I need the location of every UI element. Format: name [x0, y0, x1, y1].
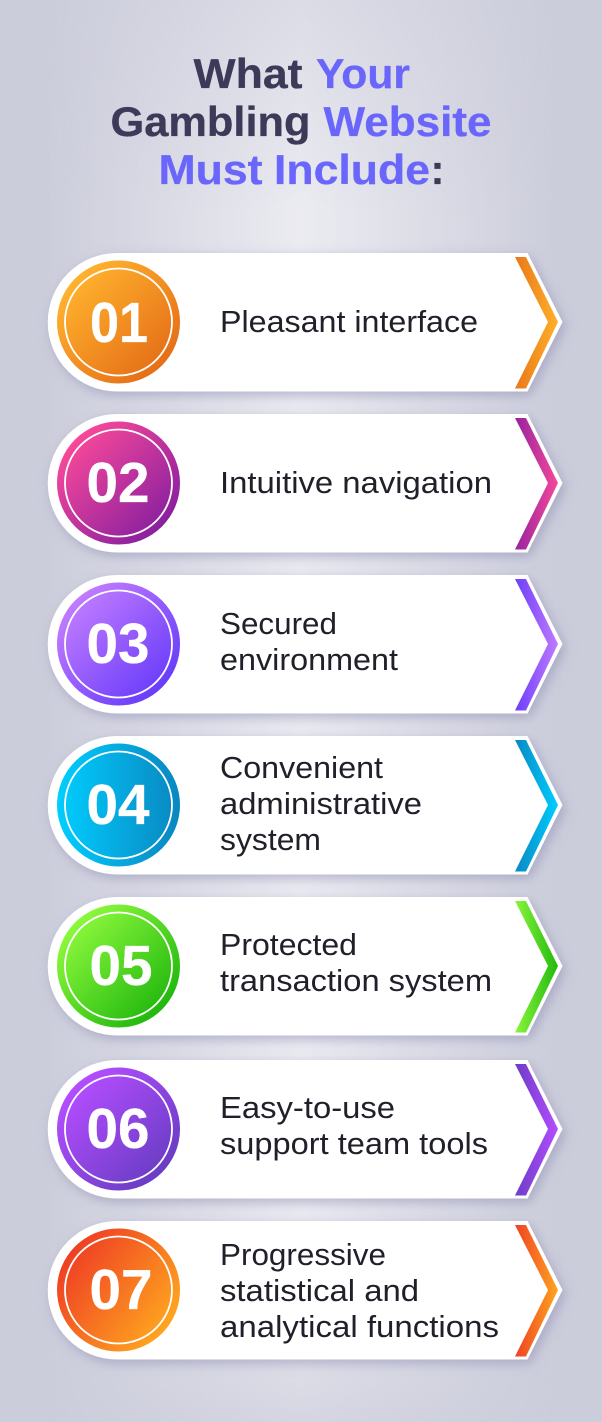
arrow: chevron 07 — [515, 1225, 558, 1356]
icon: number badge 05 — [57, 904, 180, 1028]
text: item 07 label: statistical and — [220, 1274, 419, 1308]
text: item 06 label: support team tools — [220, 1127, 488, 1161]
title: Gambling — [110, 98, 310, 145]
arrow: chevron 04 — [515, 740, 558, 872]
text: item 02 label: Intuitive navigation — [220, 466, 492, 500]
text: item 03 label: environment — [220, 643, 399, 677]
panel: item 01 — [48, 253, 563, 392]
panel: item 04 — [48, 736, 563, 874]
text: item 03 label — [220, 607, 399, 677]
text: item 03 label: Secured — [220, 607, 337, 641]
title: Must — [158, 146, 262, 193]
title: Your — [316, 50, 410, 97]
icon: number badge 01: 01 — [90, 291, 148, 355]
icon: number badge 04: 04 — [86, 773, 150, 837]
text: item 05 label — [220, 928, 492, 998]
icon: number badge 03: 03 — [86, 612, 150, 676]
arrow: chevron 02 — [515, 418, 558, 550]
icon: number badge 07 — [57, 1228, 180, 1352]
title: Website — [324, 98, 492, 145]
text: item 04 label: administrative — [220, 787, 422, 821]
title — [110, 50, 492, 193]
text: item 07 label: analytical functions — [220, 1310, 499, 1344]
icon: number badge 03 — [57, 582, 180, 706]
text: item 07 label — [220, 1238, 499, 1344]
panel: item 07 — [48, 1221, 563, 1360]
panel: item 06 — [48, 1060, 563, 1198]
text: item 07 label: Progressive — [220, 1238, 386, 1272]
title: Include — [274, 146, 430, 193]
panel: item 02 — [48, 414, 563, 552]
text: item 04 label — [220, 751, 422, 857]
arrow: chevron 06 — [515, 1064, 558, 1196]
text: item 01 label: Pleasant interface — [220, 305, 478, 339]
arrow: chevron 05 — [515, 901, 558, 1032]
text: item 04 label: Convenient — [220, 751, 384, 785]
icon: number badge 01 — [57, 260, 180, 384]
icon: number badge 02 — [57, 422, 180, 544]
icon: number badge 04 — [57, 744, 180, 866]
text: item 06 label: Easy-to-use — [220, 1091, 395, 1125]
arrow: chevron 03 — [515, 579, 558, 710]
title: : — [430, 146, 444, 193]
text: item 05 label: transaction system — [220, 964, 492, 998]
icon: number badge 02: 02 — [86, 451, 150, 515]
arrow: chevron 01 — [515, 257, 558, 388]
panel: item 05 — [48, 897, 563, 1036]
icon: number badge 06 — [57, 1068, 180, 1190]
text: item 06 label — [220, 1091, 488, 1161]
icon: number badge 06: 06 — [86, 1097, 150, 1161]
text: item 05 label: Protected — [220, 928, 357, 962]
title: What — [194, 50, 302, 97]
icon: number badge 07: 07 — [90, 1258, 152, 1322]
text: item 04 label: system — [220, 823, 321, 857]
icon: number badge 05: 05 — [90, 934, 152, 998]
panel: item 03 — [48, 575, 563, 714]
